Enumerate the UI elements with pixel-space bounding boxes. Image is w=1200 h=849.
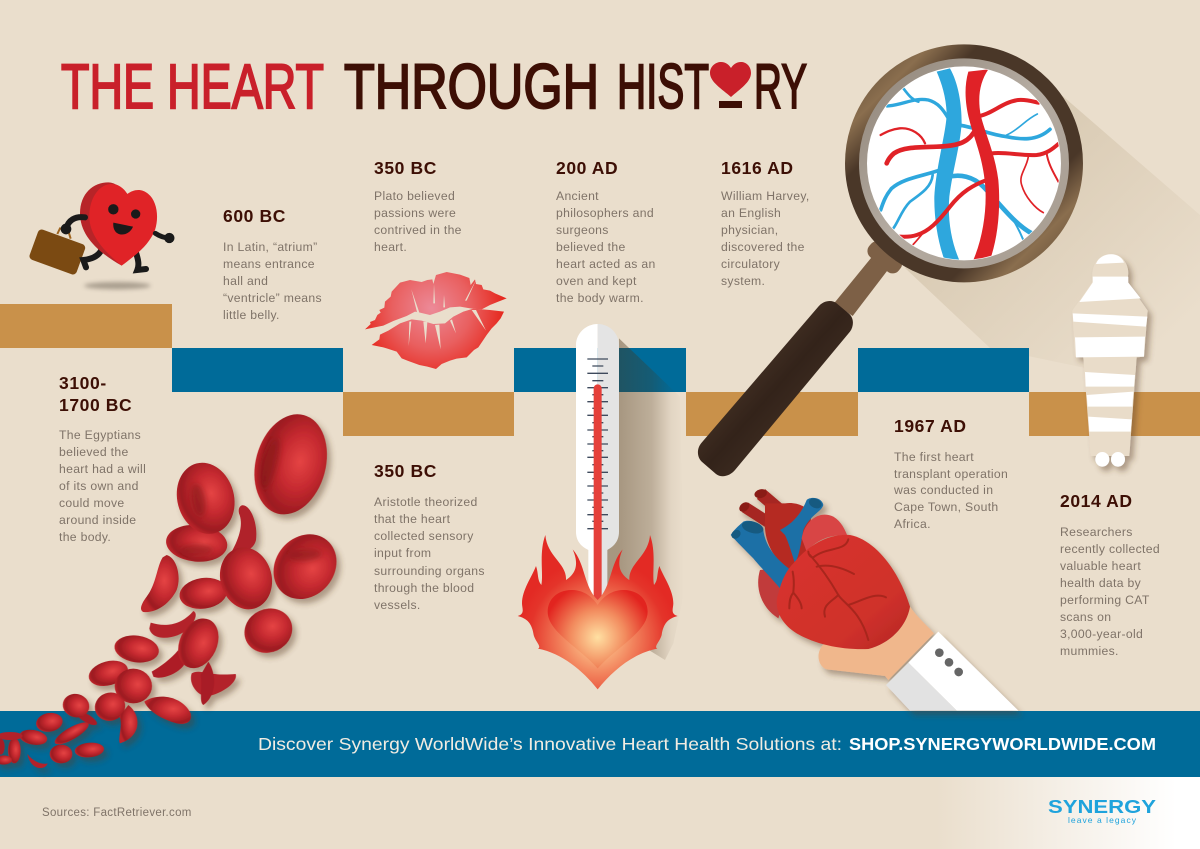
text: 3100-1700 BC: the body. [59, 530, 111, 544]
text: 3100-1700 BC: heart had a will [59, 462, 146, 476]
text: 1616 AD: 1616 AD [721, 158, 794, 178]
text: 1967 AD: Africa. [894, 517, 931, 531]
title: O [716, 52, 756, 122]
footer strip [0, 777, 1200, 849]
text: 350 BC Aristotle: vessels. [374, 598, 421, 612]
text: 200 AD: oven and kept [556, 274, 637, 288]
footer call-to-action banner: SHOP.SYNERGYWORLDWIDE.COM [849, 734, 1156, 754]
doctor's hand [819, 607, 934, 680]
sources note: Sources: FactRetriever.com [42, 807, 192, 819]
title: THE HEART [61, 52, 324, 122]
text: 1967 AD: Cape Town, South [894, 500, 998, 514]
text: 1967 AD: 1967 AD [894, 416, 967, 436]
title: HIST [617, 52, 709, 122]
text: 1967 AD: transplant operation [894, 467, 1008, 481]
text: 2014 AD: scans on [1060, 610, 1111, 624]
text: 2014 AD: 2014 AD [1060, 491, 1133, 511]
text: 600 BC: hall and [223, 274, 268, 288]
text: 200 AD: 200 AD [556, 158, 618, 178]
text: 350 BC Aristotle: surrounding organs [374, 564, 485, 578]
text: 2014 AD: mummies. [1060, 644, 1119, 658]
text: 3100-1700 BC: of its own and [59, 479, 139, 493]
logo: Synergy [1048, 797, 1156, 825]
text: 350 BC Plato: Plato believed [374, 189, 455, 203]
icon: lipstick kiss [365, 272, 507, 369]
heart organ [730, 488, 910, 649]
text: 2014 AD: performing CAT [1060, 593, 1150, 607]
text: 1616 AD [721, 158, 810, 288]
flames [518, 535, 678, 689]
text: 350 BC Plato: heart. [374, 240, 407, 254]
text: 600 BC: In Latin, “atrium” [223, 240, 318, 254]
text: 3100-1700 BC: around inside [59, 513, 136, 527]
text: 1967 AD: The first heart [894, 450, 974, 464]
text: 350 BC Aristotle [374, 461, 485, 612]
text: 1616 AD: physician, [721, 223, 778, 237]
text: 200 AD [556, 158, 656, 305]
text: 600 BC: “ventricle” means [223, 291, 322, 305]
icon: red blood cells [0, 406, 350, 768]
text: 350 BC Aristotle: Aristotle theorized [374, 495, 478, 509]
text: 350 BC Aristotle: 350 BC [374, 461, 437, 481]
title [61, 52, 807, 122]
text: 3100-1700 BC: The Egyptians [59, 428, 141, 442]
text: 1616 AD: discovered the [721, 240, 805, 254]
text: 2014 AD: 3,000-year-old [1060, 627, 1143, 641]
text: 350 BC Aristotle: that the heart [374, 512, 451, 526]
text: 2014 AD: recently collected [1060, 542, 1160, 556]
text: 600 BC [223, 206, 322, 322]
logo: Synergy: leave a legacy [1068, 815, 1137, 825]
text: 3100-1700 BC: 3100- [59, 373, 107, 393]
text: 200 AD: philosophers and [556, 206, 654, 220]
text: 350 BC Plato [374, 158, 462, 254]
text: 350 BC Plato: contrived in the [374, 223, 462, 237]
text: 2014 AD: Researchers [1060, 525, 1133, 539]
coat sleeve [886, 632, 1018, 711]
text: 3100-1700 BC [59, 373, 146, 544]
text: 200 AD: heart acted as an [556, 257, 656, 271]
text: 1967 AD: was conducted in [893, 483, 993, 497]
text: 3100-1700 BC: believed the [59, 445, 129, 459]
icon: magnifying glass over blood vessels [698, 52, 1076, 476]
icon: bandaged mummy [1072, 254, 1148, 467]
text: 200 AD: Ancient [556, 189, 599, 203]
text: 200 AD: surgeons [556, 223, 609, 237]
text: 350 BC Aristotle: collected sensory [374, 529, 474, 543]
text: 600 BC: 600 BC [223, 206, 286, 226]
thermometer long shadow [600, 338, 684, 660]
title: THROUGH [344, 52, 599, 122]
heart inside flames [548, 590, 648, 668]
icon: walking heart with briefcase [28, 182, 174, 289]
veins and arteries [881, 68, 1058, 262]
text: 1616 AD: circulatory [721, 257, 781, 271]
timeline stair bands [0, 304, 1200, 436]
text: 350 BC Plato: passions were [374, 206, 456, 220]
text: 600 BC: means entrance [223, 257, 315, 271]
text: 1616 AD: system. [721, 274, 765, 288]
text: 1616 AD: an English [721, 206, 781, 220]
icon: anatomical heart held in a hand [730, 488, 1018, 711]
text: 1967 AD [893, 416, 1008, 531]
text: 350 BC Plato: 350 BC [374, 158, 437, 178]
text: 200 AD: believed the [556, 240, 626, 254]
lens ring [852, 52, 1076, 275]
text: 200 AD: the body warm. [556, 291, 644, 305]
text: 3100-1700 BC: could move [59, 496, 125, 510]
text: 2014 AD: valuable heart [1060, 559, 1141, 573]
text: 3100-1700 BC: 1700 BC [59, 395, 132, 415]
thermometer tube [576, 324, 619, 604]
text: 600 BC: little belly. [223, 308, 280, 322]
text: 350 BC Aristotle: input from [374, 546, 431, 560]
footer call-to-action banner: Discover Synergy WorldWide’s Innovative Heart Health Solutions at: [258, 734, 842, 754]
icon: thermometer over flaming heart [518, 324, 684, 689]
magnifier handle [698, 238, 905, 476]
icon: heart in title [710, 62, 751, 108]
text: 350 BC Aristotle: through the blood [374, 581, 474, 595]
title: RY [754, 52, 807, 122]
text: 2014 AD: health data by [1060, 576, 1142, 590]
logo: Synergy: SYNERGY [1048, 797, 1156, 817]
text: 1616 AD: William Harvey, [721, 189, 810, 203]
magnifier long shadow [905, 85, 1200, 392]
text: 2014 AD [1060, 491, 1160, 658]
footer call-to-action banner [0, 711, 1200, 777]
